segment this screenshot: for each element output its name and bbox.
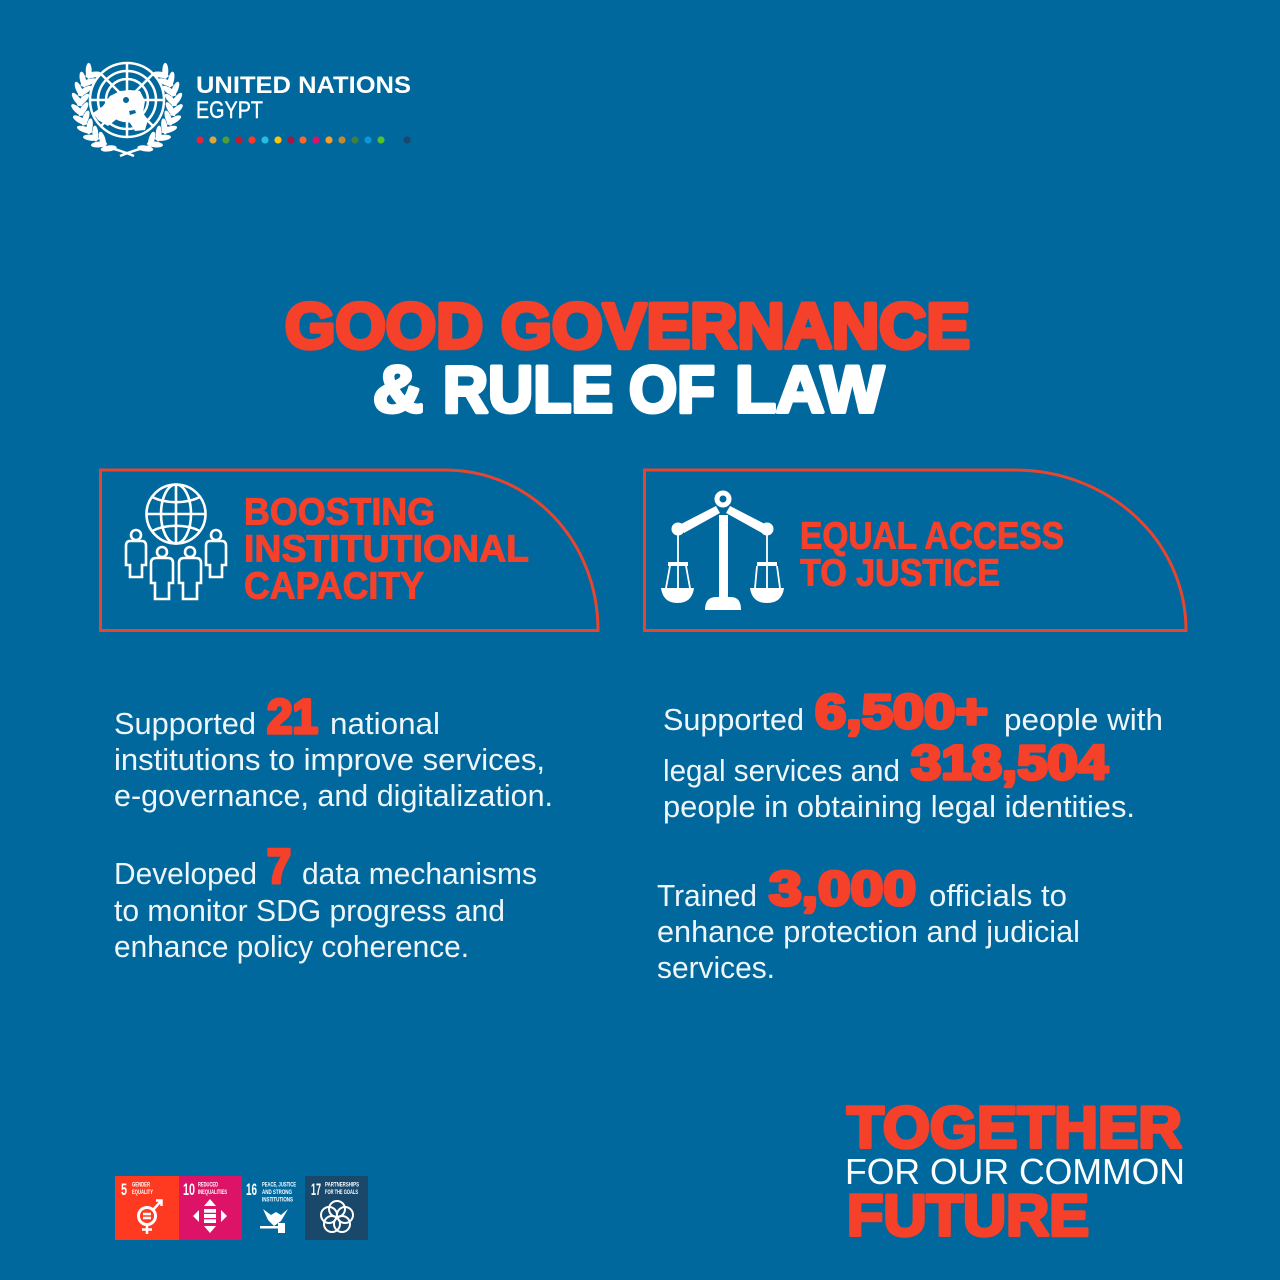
logo: United Nations Egypt xyxy=(70,63,411,156)
text block: 7 data mechanisms: enhance policy coherence. xyxy=(114,929,469,964)
text block: 6,500+ and 318,504: people with xyxy=(1004,702,1163,737)
text block: 6,500+ and 318,504: people in obtaining legal identities. xyxy=(663,789,1135,824)
text block: 3,000 officials xyxy=(657,863,1080,985)
slogan: together for our common future xyxy=(845,1096,1185,1248)
title: RULE xyxy=(443,352,613,426)
panel outline xyxy=(100,470,598,630)
wreath left branch xyxy=(70,63,117,153)
icon: SDG 10 reduced inequalities xyxy=(179,1176,242,1240)
panel outline xyxy=(644,470,1186,630)
title: GOVERNANCE xyxy=(501,290,970,362)
slogan: together for our common future: FOR OUR COMMON xyxy=(845,1151,1185,1192)
wreath crossing stems xyxy=(106,147,148,156)
icon: globe and people xyxy=(126,484,226,599)
text block: 7 data mechanisms: to monitor SDG progress and xyxy=(114,893,505,928)
text block: 3,000 officials: Trained xyxy=(657,878,757,913)
text block: 3,000 officials: enhance protection and judicial xyxy=(657,914,1080,949)
text block: 21 national institutions xyxy=(114,691,553,813)
icon: SDG 5 gender equality: GENDER xyxy=(132,1182,150,1188)
panel heading: INSTITUTIONAL xyxy=(244,528,529,570)
icon: SDG 17 partnerships: PARTNERSHIPS xyxy=(325,1182,359,1188)
icon: SDG 16 peace and justice: PEACE, JUSTICE xyxy=(262,1182,296,1188)
text block: 21 national institutions: Supported xyxy=(114,706,256,741)
text block: 21 national institutions: e-governance, and digitalization. xyxy=(114,778,553,813)
text block: 21 national institutions: national xyxy=(330,706,440,741)
stat: 6,500+: 6,500+ xyxy=(815,686,988,739)
title: GOOD xyxy=(285,290,483,362)
icon: SDG 10 reduced inequalities: INEQUALITIES xyxy=(198,1190,227,1196)
stat: 318,504: 318,504 xyxy=(911,737,1108,790)
slogan: together for our common future: TOGETHER xyxy=(847,1096,1182,1160)
icon: SDG 16 peace and justice: AND STRONG xyxy=(262,1190,292,1196)
panel heading xyxy=(244,492,529,608)
slogan: together for our common future: FUTURE xyxy=(847,1184,1089,1248)
SDG icons xyxy=(115,1176,368,1240)
title: OF xyxy=(629,352,715,426)
icon: SDG 5 gender equality xyxy=(115,1176,179,1240)
icon: SDG 10 reduced inequalities: REDUCED xyxy=(198,1182,218,1188)
title: LAW xyxy=(735,352,885,426)
title xyxy=(285,290,970,426)
icon: SDG 10 reduced inequalities: 10 xyxy=(183,1180,195,1199)
icon: SDG 17 partnerships: FOR THE GOALS xyxy=(325,1190,358,1196)
logo wordmark: UNITED NATIONS xyxy=(196,72,411,99)
icon: SDG 17 partnerships: 17 xyxy=(311,1180,321,1199)
stat: 7: 7 xyxy=(267,841,291,894)
text block: 7 data mechanisms xyxy=(114,841,537,964)
icon: SDG 16 peace and justice: INSTITUTIONS xyxy=(262,1198,293,1204)
icon: SDG 17 partnerships xyxy=(305,1176,368,1240)
stat: 21: 21 xyxy=(267,691,318,744)
stat: 3,000: 3,000 xyxy=(769,863,916,916)
panel heading: CAPACITY xyxy=(244,566,424,608)
wreath right branch xyxy=(137,63,184,153)
text block: 6,500+ and 318,504: legal services and xyxy=(663,753,900,788)
panel heading: BOOSTING xyxy=(244,492,435,534)
text block: 21 national institutions: institutions to improve services, xyxy=(114,742,545,777)
panel heading xyxy=(800,516,1064,594)
title: & xyxy=(373,352,423,426)
panel: boosting institutional capacity xyxy=(100,470,598,630)
text block: 7 data mechanisms: Developed xyxy=(114,856,257,891)
panel heading: EQUAL ACCESS xyxy=(800,516,1064,558)
globe rings and meridians xyxy=(90,63,164,137)
icon: SDG 16 peace and justice: 16 xyxy=(246,1180,257,1199)
icon: SDG 5 gender equality: EQUALITY xyxy=(132,1190,153,1196)
logo subtitle: EGYPT xyxy=(196,97,263,124)
icon: scales of justice xyxy=(661,493,784,610)
continents xyxy=(93,90,148,131)
SDG colour dots xyxy=(196,136,411,144)
panel heading: TO JUSTICE xyxy=(800,552,1000,594)
icon: UN emblem xyxy=(70,63,184,156)
panel: equal access to justice xyxy=(644,470,1186,630)
text block: 7 data mechanisms: data mechanisms xyxy=(302,856,537,891)
icon: SDG 16 peace and justice xyxy=(242,1176,305,1240)
text block: 6,500+ and 318,504: Supported xyxy=(663,702,804,737)
text block: 3,000 officials: officials to xyxy=(929,878,1067,913)
icon: SDG 5 gender equality: 5 xyxy=(121,1180,127,1199)
text block: 3,000 officials: services. xyxy=(657,950,775,985)
text block: 6,500+ and 318,504 xyxy=(663,686,1163,824)
